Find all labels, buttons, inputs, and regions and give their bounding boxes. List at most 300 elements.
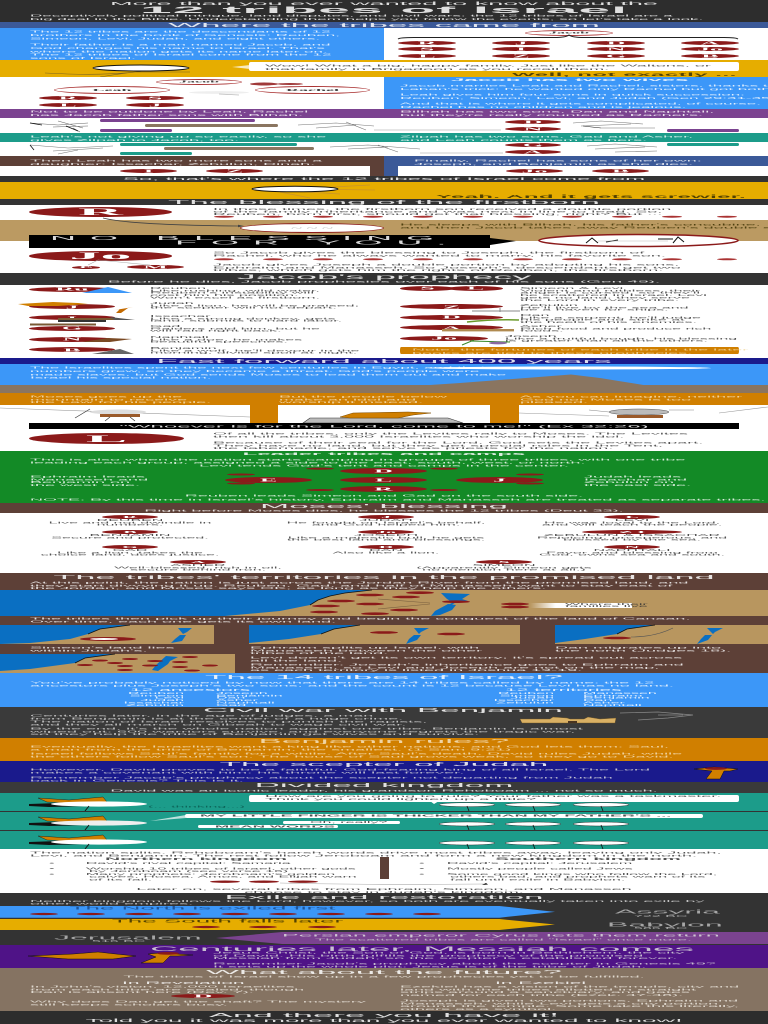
ellipse	[358, 530, 414, 534]
son L	[39, 102, 97, 106]
son I	[120, 169, 177, 173]
text three: so they help the tribe of Benjamin get wives and survive.	[30, 733, 479, 736]
left list names two: Dan	[216, 697, 245, 699]
son Z	[206, 169, 263, 173]
white box	[398, 166, 768, 176]
black speech text: FOR YOU.	[175, 240, 460, 246]
left list names: Issachar	[124, 701, 184, 704]
R ellipse	[340, 486, 427, 492]
jacob ellipse	[525, 30, 613, 36]
arrow label: The North is exiled first	[70, 906, 335, 911]
text: GAD	[113, 549, 147, 552]
jacob: Jacob	[179, 81, 219, 83]
territories summary two: as each territory is listed in Joshua 13-19.	[250, 669, 582, 672]
later text	[0, 888, 768, 893]
revelation text: In John's vision, 12,000 Israelites	[30, 985, 295, 988]
joseph adoption text: Ephraim and Manasseh. So Joseph's descendants get two	[213, 266, 681, 269]
blessing judah	[286, 515, 486, 529]
joseph prophecy: Joseph	[505, 335, 557, 338]
reuben prophecy: Reuben's instability will	[150, 291, 314, 294]
ezekiel text two: Joseph is given two portions, Ephraim and	[400, 999, 738, 1002]
ellipse: N	[625, 545, 639, 549]
later text: choose to stay in Judah's kingdom.	[244, 890, 524, 893]
leah children text: daughter: Issachar, Zebulun, Dinah.	[30, 162, 315, 165]
son S	[492, 41, 550, 45]
joseph marker: Jo	[431, 336, 457, 340]
king three	[29, 833, 147, 849]
right camp text: Judah leads	[584, 474, 681, 478]
origin paragraph two: God changes his name to Israel. That's	[30, 46, 325, 49]
moses text one	[30, 395, 211, 404]
rachel children text	[414, 158, 702, 166]
northern bullets: • Many prophets: Jeroboam's golden	[49, 872, 335, 875]
joseph prophecy: is greater than all the others.	[505, 340, 708, 342]
panel: golden calf scene	[0, 405, 768, 423]
right camp text	[584, 474, 691, 486]
text	[286, 534, 486, 541]
heading: Divided kingdom	[255, 782, 513, 788]
footer panel	[0, 1011, 768, 1024]
text two: and they all march on Gibeah to wage civil war.	[30, 723, 406, 726]
right list names two: Benjamin	[583, 697, 650, 699]
benjamin prophecy	[150, 347, 359, 354]
southern bullets: • Some good kings who follow the Lord,	[419, 872, 717, 875]
messiah text two	[213, 962, 716, 967]
judah marker	[29, 304, 115, 309]
gad prophecy	[150, 325, 320, 332]
heading text: The blessing of the firstborn	[168, 199, 600, 205]
arrow label: The South falls later	[112, 919, 343, 924]
left camp text: Ephraim leads	[30, 474, 145, 478]
text: and God helped him.	[312, 524, 460, 526]
bubble: oh really	[283, 821, 400, 824]
son G2	[587, 54, 645, 58]
son B	[592, 169, 649, 173]
text: Like a lion, takes the	[57, 551, 203, 554]
reuben prophecy	[150, 286, 320, 299]
rachel: Rachel	[286, 88, 339, 92]
purple left text: has Jacob father sons with Bilhah.	[30, 113, 303, 117]
sketch right	[573, 120, 655, 128]
levi text one: Of all the tribes, only the Levites rally to Moses. The Levites	[213, 432, 688, 435]
teal right text	[400, 134, 693, 141]
jerusalem label: Jerusalem	[54, 935, 202, 941]
text two	[30, 752, 682, 758]
rachel children text: Finally, Rachel has sons of her own:	[414, 158, 702, 162]
territories text: At this point, the nation is just across the Jordan River from the promised land, and	[30, 580, 688, 584]
southern heading: Southern kingdom	[495, 856, 681, 860]
reuben text: of the family inheritance and was next in line to lead. So,	[213, 210, 662, 213]
return text: Persian emperor Cyrus lets them return	[282, 932, 720, 937]
southern bullets	[419, 862, 717, 881]
text: REUBEN	[97, 519, 163, 522]
heading text: Where the tribes came from	[168, 22, 600, 28]
son L2	[398, 54, 456, 58]
ezekiel text two: around the temple. Some take this literally,	[400, 1005, 739, 1008]
issachar prophecy: Issachar	[150, 314, 210, 317]
wives paragraph one: Laban's trick: he wanted only Rachel but got both.	[400, 87, 768, 90]
text: ASHER	[170, 564, 226, 567]
joseph marker	[400, 336, 488, 340]
son Jo	[506, 169, 563, 173]
right list heading: 12 territories	[505, 688, 622, 691]
issachar prophecy	[150, 314, 342, 322]
exodus text: numbers grew, so they became a threat. God's people were	[30, 370, 479, 373]
left list names two: Asher	[216, 699, 258, 702]
south camp text: Reuben leads Simeon and Gad on the south side.	[185, 494, 583, 497]
sketch left	[30, 120, 88, 132]
benjamin prophecy: morning, divide spoil at night.	[150, 351, 357, 354]
E ellipse	[225, 477, 312, 483]
territories summary two: Manasseh, so Levi and Joseph are not on the map,	[250, 666, 659, 669]
blessing joseph	[286, 530, 486, 544]
blessing zebulun and issachar	[532, 530, 732, 544]
text: Secure and protected.	[51, 536, 209, 539]
gad prophecy: Gad	[150, 325, 180, 328]
text two: The nation of Israel resolves to punish the rapists,	[30, 720, 427, 723]
joseph prophecy: Like a fruitful bough, his blessing	[505, 337, 737, 340]
zebulun prophecy	[520, 304, 688, 311]
text: blessed by the sea.	[563, 539, 701, 541]
divider rectangle	[380, 857, 388, 879]
band: purple	[0, 109, 768, 118]
teal left text	[30, 134, 326, 142]
asher prophecy	[520, 325, 711, 332]
moses text one: Moses goes up the	[30, 395, 182, 398]
origin paragraph two: where the nation gets its name later on.	[30, 49, 328, 52]
text	[532, 519, 732, 526]
blue arrow	[0, 906, 555, 918]
note text: NOTE: By this time in Israel's history, Ephraim and Manasseh are treated as separate tribes.	[30, 498, 765, 501]
ezekiel text one: land with the tribes allotted in straight	[400, 988, 696, 991]
levi text one: then kill about 3,000 Israelites who worship the idol.	[213, 434, 624, 438]
text	[532, 549, 732, 556]
arrow from R to figure	[102, 218, 244, 228]
northern tribes row	[30, 912, 441, 916]
speech bubble tail	[232, 65, 249, 69]
panel: tan blessing band	[0, 220, 768, 241]
ellipse: A	[191, 560, 205, 564]
brown line	[164, 147, 314, 150]
panel: exile and restoration	[0, 893, 768, 945]
text: ZEBULUN & ISSACHAR	[544, 534, 720, 537]
asher prophecy: Rich food and produce rich	[520, 327, 711, 330]
moses text two: make an idol and	[279, 398, 416, 401]
map label	[565, 603, 648, 607]
naphtali prophecy: beautiful speeches.	[150, 340, 288, 343]
reuben text: In those times, the firstborn son received a double portion	[213, 207, 671, 210]
teal left text: gives Zilpah to Jacob, too.	[30, 138, 239, 141]
issachar icon	[55, 315, 135, 323]
reuben prophecy: Won't excel as firstborn.	[150, 296, 320, 299]
exodus text: Israel his special nation.	[30, 376, 211, 379]
naphtali prophecy: Like a doe, he makes	[150, 338, 302, 340]
orange column right	[490, 405, 519, 423]
purple right text	[400, 110, 714, 117]
left list names: Levi	[155, 697, 184, 699]
map: all tribes	[0, 654, 235, 673]
origin paragraph one: brothers in the book of Genesis: Reuben,	[30, 34, 340, 37]
sketch right	[587, 144, 657, 152]
simeon and levi prophecy: be scattered in Israel. Levi	[520, 294, 707, 296]
babylon date: 586 BC	[634, 927, 687, 930]
son R	[398, 41, 456, 45]
moses text two: worship it instead.	[279, 401, 423, 404]
king one	[29, 795, 147, 811]
brown line	[145, 124, 278, 127]
zebulun prophecy: Zebulun	[520, 304, 578, 307]
territories summary two: Remember: Joseph's inheritance goes to Ephraim and	[250, 663, 684, 666]
ellipse L: L	[467, 286, 484, 290]
small son markers	[214, 258, 737, 260]
panel: yellow question band	[0, 60, 768, 77]
wives paragraph two	[400, 93, 768, 100]
title line one: More than you ever wanted to know about the	[110, 1, 658, 6]
zebulun marker: Z	[443, 304, 460, 309]
text: He was loyal to the Lord,	[544, 521, 720, 524]
moses text two	[279, 395, 447, 404]
person with rays	[252, 184, 375, 198]
origin paragraph three: The 12 tribes of Israel come from the 12	[30, 53, 331, 56]
ellipse B	[171, 994, 235, 998]
dan prophecy: his people and strike at	[520, 318, 685, 321]
ellipse	[604, 515, 660, 519]
messiah text two: Remember Jacob's prophecy about the scepter in Genesis 49?	[213, 961, 716, 965]
asher prophecy: Asher	[520, 325, 562, 328]
scene: rachel and bilhah	[0, 118, 768, 133]
sketch left	[30, 144, 113, 154]
jacob angry figure	[538, 234, 739, 248]
subheading: The tribes of Israel show up in a few prophecies yet to be fulfilled.	[123, 975, 645, 978]
panel: northern and southern kingdoms	[0, 849, 768, 893]
text one: from Benjamin is at the center of a huge crime.	[30, 717, 403, 720]
text	[30, 900, 704, 905]
left list names: Judah	[140, 699, 184, 702]
panel: civil war with benjamin	[0, 707, 768, 738]
moses text one: the Law for his people.	[30, 401, 211, 404]
fort icon	[520, 717, 617, 724]
territories text: they start divvying it up. Reuben, Gad, and half of Manasseh want to stay east of	[30, 583, 672, 586]
right list names two	[583, 692, 657, 706]
left camp text: Benjamin on	[30, 480, 130, 483]
wives paragraph three	[400, 102, 761, 108]
heading: What about the future?	[206, 968, 562, 975]
caption: judah	[30, 646, 175, 651]
panel: jacob wives text	[384, 77, 768, 109]
speech bubble	[249, 62, 739, 71]
text: JUDAH	[359, 519, 413, 522]
panel: what about the future	[0, 968, 768, 1011]
son J	[126, 102, 184, 106]
panel: orange band	[0, 393, 768, 405]
joseph adoption text	[213, 263, 681, 272]
levi text two: They have no land, but they get special roles in the Tent,	[213, 443, 663, 446]
ellipse L: L	[86, 433, 127, 444]
prophecy subheading: Before he dies, Jacob prophesies over each of his sons (Gen 49).	[108, 280, 660, 283]
subheading: David was an iconic leader, his grandson Rehoboam ... not so much.	[110, 788, 658, 792]
green text one: This is also when the nation starts camping in groups of three tribes, with one tribe	[30, 457, 685, 461]
bubble text: mean words: MEAN WORDS	[215, 825, 335, 828]
ellipse	[102, 515, 158, 519]
son Z	[492, 54, 550, 58]
right list names two: Manasseh	[583, 692, 657, 695]
text: Well-blessed, rich in oil,	[114, 566, 282, 569]
text: DAN	[369, 549, 403, 552]
divider	[0, 830, 768, 831]
panel: scepter of judah	[0, 761, 768, 782]
reuben sleeping figure: ~ ~ ~	[291, 226, 333, 229]
issachar prophecy: land, submits to hard labor.	[150, 319, 342, 322]
revelation question	[30, 1000, 366, 1005]
ellipse Jo	[29, 251, 172, 261]
text: LEVI	[615, 519, 649, 522]
ezekiel text one	[400, 985, 739, 997]
teal line right	[667, 143, 739, 146]
purple right text: but they're really counted as Rachel's.	[400, 113, 703, 117]
purple line two	[100, 128, 172, 132]
right list names: Reuben	[498, 692, 554, 695]
simeon and levi marker	[400, 286, 503, 290]
naphtali prophecy: Naphtali	[150, 335, 209, 338]
territories summary one	[250, 656, 682, 661]
messiah text one	[213, 951, 684, 960]
moses text three: God nor Moses is too	[520, 398, 691, 401]
panel: rachel children	[384, 156, 768, 176]
ellipse	[476, 560, 532, 564]
text: (Apparently Simeon gets	[416, 566, 592, 569]
J ellipse: J	[493, 478, 506, 482]
joseph text	[213, 250, 666, 257]
heading band: fast forward	[0, 358, 768, 364]
text	[286, 519, 486, 526]
orange column left	[250, 405, 278, 423]
yellow arrow	[0, 919, 555, 930]
southern bullets: fall until exile in Babylon.	[450, 878, 625, 881]
ellipse L	[29, 433, 184, 444]
text	[30, 680, 674, 686]
text two: Israel follows Saul's family for a while. After Saul's death, David rules Judah, while	[30, 752, 682, 755]
asher icon	[440, 328, 520, 333]
jacob	[156, 79, 242, 85]
southern bullets: others bad, and prophets warn of its	[450, 875, 705, 878]
orange note text: books are tied to these prophecies.	[412, 351, 692, 354]
green heading: Leader tribes and camps	[243, 452, 525, 456]
text: Neither kingdom follows the Lord, however, so both are eventually taken into exile by	[30, 900, 704, 903]
map label: Where their	[565, 603, 648, 605]
ellipse	[170, 560, 226, 564]
text: numbers.	[97, 524, 163, 526]
left list names two: Benjamin	[216, 694, 283, 697]
ellipse L	[448, 286, 503, 290]
leah: Leah	[92, 88, 132, 92]
right camp text: the east side.	[584, 483, 691, 486]
naphtali marker	[29, 336, 115, 342]
bubble two tail	[150, 815, 190, 822]
intro text	[30, 14, 703, 21]
left list names two: Joseph	[216, 692, 268, 695]
reuben prophecy: cost him his position.	[150, 294, 299, 296]
text: choice land, does justice.	[41, 554, 219, 556]
black speech text	[50, 235, 460, 246]
bubble one	[249, 795, 739, 802]
small camp markers	[220, 467, 550, 493]
heading panel: jacob's prophecy	[0, 273, 768, 285]
left list names	[114, 692, 184, 706]
left list names: Zebulun	[126, 704, 184, 707]
northern heading: Northern kingdom	[105, 856, 287, 860]
assyria date: 722 BC	[634, 914, 687, 917]
split text	[30, 851, 721, 857]
hearts	[250, 82, 303, 86]
teal right text: and Leah counts them as hers.	[400, 138, 647, 141]
messiah text one: Messiah from Judah, so the scepter is established forever.	[213, 957, 677, 960]
text two	[30, 776, 613, 781]
bubble two text: MY LITTLE FINGER IS THICKER THAN MY FATHER'S ...	[200, 814, 671, 818]
teal right text: Zilpah has two sons, Gad and Asher,	[400, 134, 693, 138]
dan marker	[400, 315, 503, 320]
son Jo	[681, 47, 739, 51]
son A	[505, 150, 561, 154]
bubble text: Think you could lighten up a little?	[265, 798, 536, 801]
leah children text	[30, 158, 322, 166]
conquest text: The tribes then pick up their journey and begin the conquest of the land of Canaan.	[30, 617, 690, 620]
map: ephraim	[249, 625, 520, 644]
assyria label: Assyria	[615, 909, 720, 915]
babylon label: Babylon	[607, 922, 723, 928]
origin paragraph one: Simeon, Levi, Judah, and eight others.	[30, 37, 320, 40]
golden calf on altar	[278, 405, 490, 423]
caption: dan	[555, 646, 731, 651]
text one: Centuries later, in the age of judges, a man	[30, 714, 373, 717]
text: the best land and blessings.	[287, 539, 485, 541]
joseph text: So Jacob gives the blessing to Joseph, the firstborn of	[213, 250, 644, 254]
messiah text one: Jesus Christ, the Son of God, is born in Bethlehem, the city	[213, 951, 684, 954]
moses text three	[520, 395, 742, 404]
ellipse M	[72, 266, 100, 268]
later ellipses with arrow	[210, 880, 500, 886]
header panel	[0, 0, 768, 22]
ellipse	[358, 515, 414, 519]
bubble text: oh really: Oh, really?	[310, 821, 387, 824]
moses text three: As you can imagine, neither	[520, 395, 742, 398]
joseph prophecy	[505, 335, 737, 342]
text: BENJAMIN	[90, 534, 170, 537]
wives paragraph three: And that is where it gets complicated, of course.	[400, 102, 761, 105]
gad prophecy: will raid right back.	[150, 330, 282, 332]
purple right text: Bilhah has two sons, Dan and Naphtali,	[400, 110, 714, 113]
ellipse: B	[123, 530, 137, 534]
caption: judah: Simeon's land lies	[30, 645, 175, 649]
black quote bar	[29, 423, 739, 429]
origin paragraph one: The 12 tribes are the descendants of 12	[30, 30, 331, 33]
ellipse S	[400, 286, 455, 290]
return subtext: The scattered tribes are called "Israel" once more.	[315, 938, 692, 941]
text: no mention here at all.)	[422, 569, 586, 571]
reuben prophecy: Like rushing, wild water,	[150, 289, 320, 291]
gad icon	[30, 322, 100, 326]
left list names two: Naphtali	[216, 701, 275, 704]
text: and will teach the people.	[542, 524, 722, 526]
benjamin marker	[29, 347, 115, 352]
messiah text two: It sets up the whole plot: Jesus is of the tribe of Judah.	[213, 964, 646, 967]
revelation question: still keeps scholars busy.	[30, 1002, 228, 1005]
dan prophecy	[520, 314, 701, 323]
ellipse	[604, 545, 660, 549]
panel: firstborn reuben	[0, 205, 768, 220]
conquest text: Over time, each one gets its own land.	[30, 620, 336, 623]
panel: centuries later messiah	[0, 945, 768, 968]
intro text: big deal in the Bible. Understanding them helps you follow the events, so let's take a look.	[30, 18, 703, 21]
